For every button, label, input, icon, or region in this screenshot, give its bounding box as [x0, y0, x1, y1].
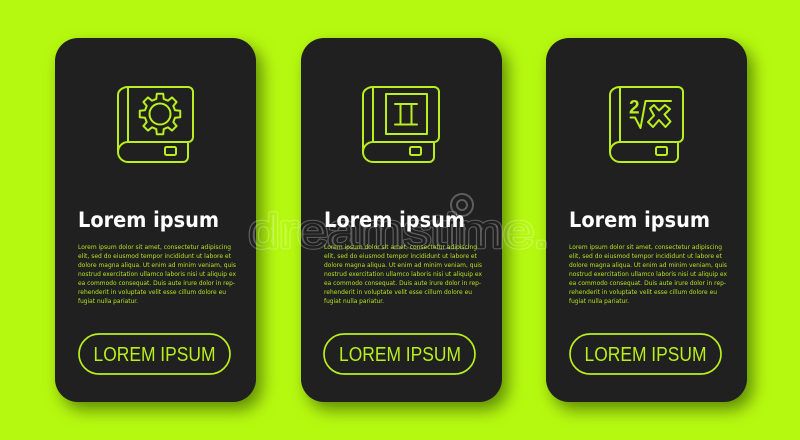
body text: dolore magna aliqua. Ut enim ad minim veniam, quis — [78, 262, 236, 269]
body text: nostrud exercitation ullamco laboris nisi ut aliquip ex — [569, 271, 727, 278]
body text: fugiat nulla pariatur. — [78, 298, 138, 305]
body text — [569, 244, 727, 305]
icon: book with gear — [118, 87, 193, 162]
body text: rehenderit in voluptate velit esse cillum dolore eu — [78, 289, 226, 296]
button: LOREM IPSUM — [339, 344, 461, 366]
button — [324, 334, 475, 374]
heading: Lorem ipsum — [569, 208, 710, 232]
body text: fugiat nulla pariatur. — [569, 298, 629, 305]
body text: nostrud exercitation ullamco laboris nisi ut aliquip ex — [324, 271, 482, 278]
button: LOREM IPSUM — [94, 344, 216, 366]
body text — [324, 244, 482, 305]
body text: Lorem ipsum dolor sit amet, consectetur adipiscing — [569, 244, 722, 251]
body text: ea commodo consequat. Duis aute irure dolor in rep- — [78, 280, 235, 287]
button — [79, 334, 230, 374]
body text: Lorem ipsum dolor sit amet, consectetur adipiscing — [324, 244, 477, 251]
icon: book with gemini sign — [363, 87, 439, 162]
infographic: three book cards — [50, 35, 764, 421]
heading: Lorem ipsum — [78, 208, 219, 232]
button — [570, 334, 721, 374]
body text: Lorem ipsum dolor sit amet, consectetur adipiscing — [78, 244, 231, 251]
body text: nostrud exercitation ullamco laboris nisi ut aliquip ex — [78, 271, 236, 278]
panel: card 2 — [301, 38, 502, 402]
body text: dolore magna aliqua. Ut enim ad minim veniam, quis — [569, 262, 727, 269]
watermark — [248, 193, 547, 250]
body text: elit, sed do eiusmod tempor incididunt ut labore et — [569, 253, 723, 260]
body text: ea commodo consequat. Duis aute irure dolor in rep- — [324, 280, 481, 287]
body text: elit, sed do eiusmod tempor incididunt ut labore et — [324, 253, 478, 260]
body text: elit, sed do eiusmod tempor incididunt ut labore et — [78, 253, 232, 260]
body text: fugiat nulla pariatur. — [324, 298, 384, 305]
icon: book with math symbols — [610, 87, 683, 162]
button: LOREM IPSUM — [584, 344, 706, 366]
body text — [78, 244, 236, 305]
panel: card 1 — [55, 38, 256, 402]
body text: ea commodo consequat. Duis aute irure dolor in rep- — [569, 280, 726, 287]
body text: rehenderit in voluptate velit esse cillum dolore eu — [324, 289, 472, 296]
body text: rehenderit in voluptate velit esse cillum dolore eu — [569, 289, 717, 296]
icon: book with math symbols: 2 — [629, 98, 640, 118]
body text: dolore magna aliqua. Ut enim ad minim veniam, quis — [324, 262, 482, 269]
panel: card 3 — [546, 38, 747, 402]
heading: Lorem ipsum — [324, 208, 465, 232]
